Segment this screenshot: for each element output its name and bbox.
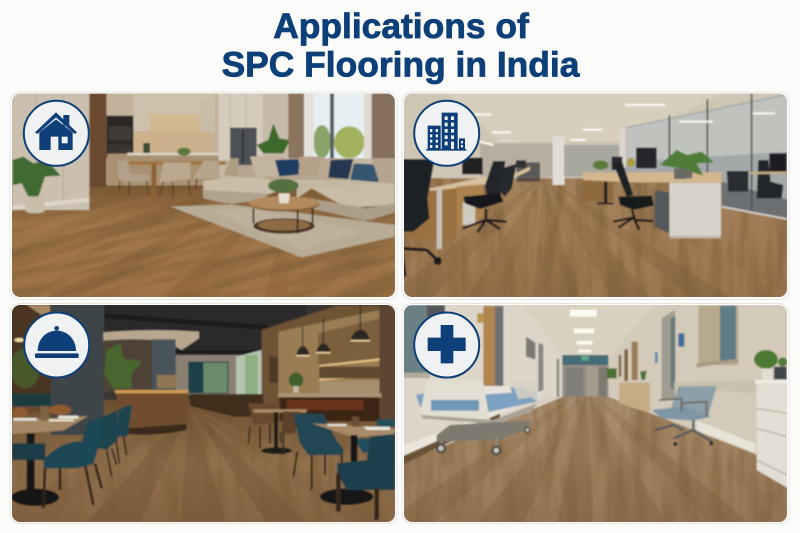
plant xyxy=(13,157,61,197)
circular bar xyxy=(103,339,152,392)
waiting chairs xyxy=(672,386,717,415)
rug xyxy=(171,204,395,257)
title: SPC Flooring in India xyxy=(222,44,580,84)
right wall and bar xyxy=(260,305,390,400)
dining set xyxy=(129,161,226,165)
chair right xyxy=(613,163,633,197)
icon: serving cloche xyxy=(24,312,89,378)
icon: medical cross xyxy=(414,312,479,378)
photo: hospital corridor xyxy=(402,303,790,527)
plant on desk xyxy=(660,150,714,176)
ceiling lights xyxy=(474,105,775,145)
photo: living room with wood floor xyxy=(12,94,395,297)
left wall details xyxy=(402,305,427,373)
coffee table xyxy=(253,218,315,234)
panel: hospitality restaurant xyxy=(10,303,397,524)
panel: residential living room xyxy=(10,92,398,300)
hospital bed xyxy=(416,387,537,412)
sofa xyxy=(238,164,354,181)
white cabinet xyxy=(755,380,788,383)
icon: house xyxy=(24,101,89,166)
far tables xyxy=(190,394,263,417)
far room xyxy=(174,354,242,396)
photo: restaurant xyxy=(10,303,397,523)
pendant lamps xyxy=(303,305,360,347)
title xyxy=(222,6,580,84)
monitors and far chairs xyxy=(769,153,787,172)
icon: buildings xyxy=(414,101,479,166)
left chairs xyxy=(485,161,505,202)
ceiling lights xyxy=(570,310,597,353)
glass wall xyxy=(624,94,787,200)
panel: healthcare hospital corridor xyxy=(402,303,790,527)
right wall details xyxy=(698,306,738,365)
left desk xyxy=(430,167,530,191)
panel: commercial office xyxy=(402,92,790,300)
teal chairs right xyxy=(293,414,343,455)
photo: open plan office xyxy=(402,92,790,300)
left table and chairs xyxy=(12,416,88,434)
left wall and column xyxy=(12,303,51,397)
right desk xyxy=(583,172,722,182)
title: Applications of xyxy=(273,6,529,46)
